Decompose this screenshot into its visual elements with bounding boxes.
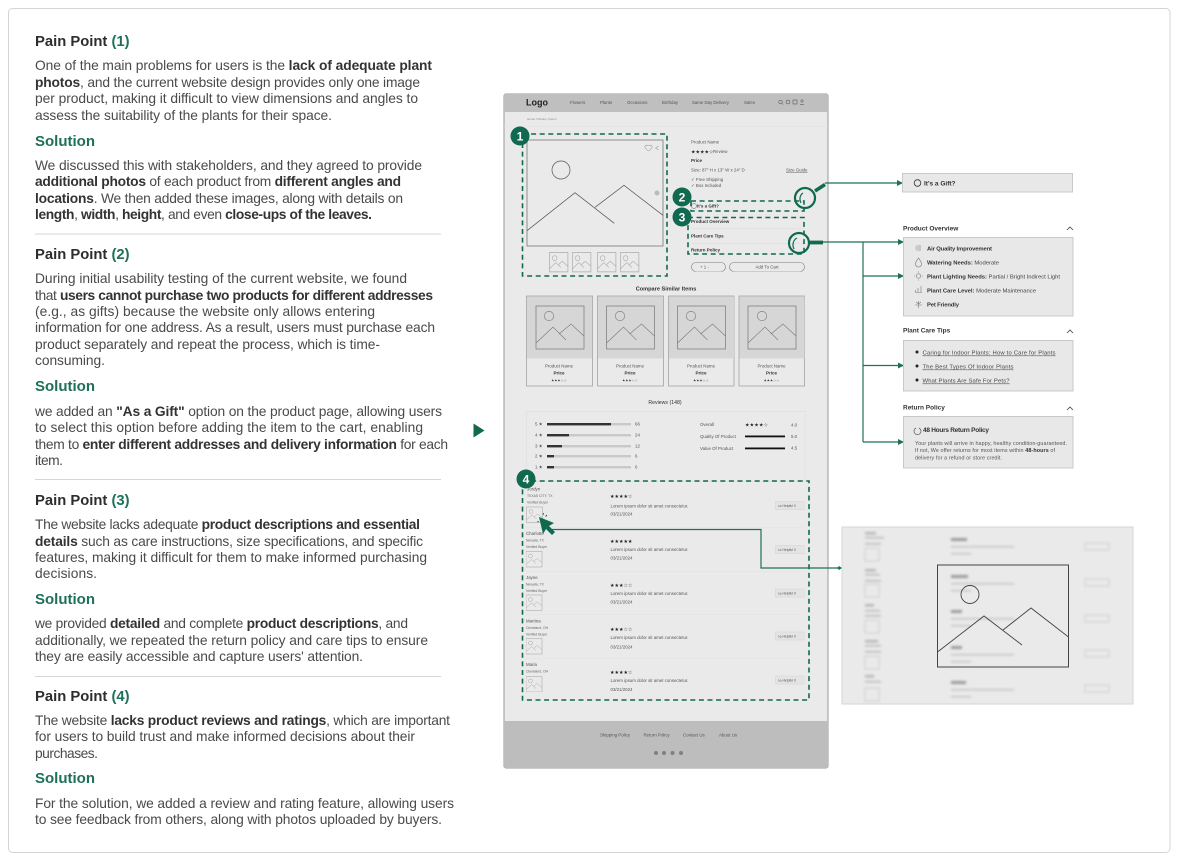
product overview panel: Plant Care Level: Moderate Maintenance (927, 288, 1037, 294)
product details: Product Name (691, 140, 720, 144)
review: Martina (526, 618, 804, 654)
review: Jayne: 👍︎ Helpful 0 (778, 592, 796, 596)
callout: return policy (903, 404, 1073, 468)
solution 1 text: length, width, height, and even close-ups of the leaves. (35, 207, 372, 222)
product details: It's a Gift? (697, 204, 719, 208)
rating distribution bars: 66 (635, 422, 640, 426)
dashed highlight: product accordions (688, 218, 804, 254)
pain point 2 text (35, 271, 435, 368)
product details: Add To Cart (755, 264, 779, 270)
product card 4: ★★★☆☆ (764, 378, 780, 382)
pain point 2 text: product separately and repeat the process, which is time- (35, 337, 380, 352)
product card 1 (526, 296, 592, 386)
badge 2 (672, 188, 692, 206)
product details: Price (691, 158, 703, 163)
review: Jayne: 03/21/2024 (610, 600, 633, 604)
wireframe footer (504, 721, 828, 768)
arrow: review photo connector (537, 513, 840, 570)
pain point 4 text: purchases. (35, 746, 98, 761)
rating distribution bars: 4 ★ (535, 432, 543, 438)
pain point 4 text: for users to build trust and make informed decisions about their (35, 729, 415, 744)
product card 2: Product Name (616, 364, 645, 368)
wireframe header (504, 94, 828, 127)
review: Jordyn: Jordyn (527, 486, 541, 492)
product card 1: Product Name (545, 364, 574, 368)
pain point 2 heading: Pain Point (2) (35, 247, 130, 263)
dashed highlight: product images (522, 134, 667, 276)
wireframe footer: Shipping Policy (600, 732, 631, 738)
overall ratings: Value Of Product (700, 446, 734, 451)
return policy heading: Return Policy (903, 404, 945, 412)
rating distribution bars: 6 (635, 464, 638, 470)
customer review list (526, 486, 804, 692)
wireframe header: Plants (600, 100, 613, 105)
product card 1: Price (553, 370, 565, 376)
pain point 2 text: (e.g., as gifts) because the website only allows entering (35, 304, 375, 319)
solution 3 heading: Solution (35, 591, 95, 608)
review: Martina: 03/21/2024 (610, 644, 633, 650)
reviews summary (526, 400, 805, 482)
wireframe header: Home / Plants / Ipsum (527, 117, 557, 121)
dashed highlight: customer reviews (522, 481, 809, 700)
rating distribution bars: 3 ★ (535, 444, 543, 448)
solution 1 text: locations. We then added these images, along with details on (35, 191, 403, 206)
return policy panel: Your plants will arrive in happy, healthy condition-guaranteed. (915, 441, 1067, 447)
review: Maria: Maria (526, 662, 538, 667)
review: Charlotte: Charlotte (526, 531, 544, 536)
product details: Product Overview (691, 219, 730, 224)
badge 1: 1 (517, 130, 524, 144)
product card 1: ★★★☆☆ (551, 378, 568, 382)
arrow: accordion connector (823, 242, 903, 442)
product details: Plant Care Tips (691, 234, 724, 238)
review: Jayne: ★★★☆☆ (610, 583, 633, 589)
review: Jayne: Jayne (526, 575, 538, 580)
wireframe footer: About Us (719, 732, 738, 738)
pain point 4 text (35, 713, 450, 761)
plant care tips panel: Caring for Indoor Plants: How to Care for Plants (922, 350, 1056, 356)
pain point 4 text: The website lacks product reviews and ratings, which are important (35, 713, 450, 728)
enlarged photo placeholder (938, 565, 1068, 667)
product details (691, 140, 808, 272)
overall ratings: 4.5 (791, 446, 798, 450)
pain point 1 text: One of the main problems for users is the lack of adequate plant (35, 58, 432, 73)
wireframe header: Logo (526, 98, 548, 108)
product overview panel: Air Quality Improvement (927, 246, 992, 252)
pain point 2 text: information for one address. As a result, users must purchase each (35, 320, 435, 335)
overall ratings: ★★★★☆ (745, 422, 769, 428)
return policy panel: 48 Hours Return Policy (923, 427, 989, 434)
review: Jordyn: TEXAS CITY, TX (527, 494, 553, 498)
overall ratings: Quality Of Product (700, 434, 737, 439)
wireframe footer: Contact Us (683, 732, 706, 738)
review: Martina: ★★★☆☆ (610, 627, 633, 633)
review: Jordyn: 03/21/2024 (610, 512, 633, 516)
solution 3 text: additionally, we repeated the return policy and care tips to ensure (35, 633, 428, 648)
solution 2 text: we added an "As a Gift" option on the product page, allowing users (34, 404, 442, 419)
callout: product overview (903, 226, 1073, 316)
review: Jayne: Lorem ipsum dolor sit amet consectetur. (610, 591, 688, 596)
rating distribution bars: 6 (635, 454, 638, 458)
product card 4: Product Name (757, 364, 786, 368)
arrow: gift option connector (825, 182, 902, 184)
pain point 1 text: assess the suitability of the plants for their space. (35, 108, 332, 123)
return policy panel (904, 416, 1073, 468)
review: Jordyn: Verified Buyer (527, 500, 549, 504)
rating distribution bars: 12 (635, 444, 640, 448)
solution 2 heading: Solution (35, 378, 95, 395)
return policy panel: delivery for a refund or store credit. (915, 456, 1002, 462)
compare similar items (526, 286, 804, 386)
product card 3: Price (695, 370, 707, 376)
review: Maria: ★★★★☆ (610, 670, 633, 676)
pain point 1 text: per product, making it difficult to view dimensions and angles to (35, 91, 418, 106)
dashed highlight: gift option (691, 201, 804, 211)
callout: gift option (902, 174, 1072, 192)
blurred review list (865, 532, 1109, 701)
wireframe header: Occasions (627, 100, 648, 105)
overall ratings: 5.0 (791, 434, 798, 439)
review: Maria: 03/21/2024 (610, 687, 633, 692)
product details: + 1 - (700, 264, 709, 270)
pain point 1 heading: Pain Point (1) (35, 34, 130, 50)
callout: gift option: It's a Gift? (924, 180, 956, 188)
product overview panel: Pet Friendly (927, 302, 960, 308)
review: Martina: 👍︎ Helpful 0 (778, 634, 796, 638)
main product image (527, 140, 663, 272)
solution 1 text: We discussed this with stakeholders, and they agreed to provide (35, 158, 422, 173)
wireframe header: Sales (744, 100, 756, 105)
panel: page wireframe (504, 94, 828, 768)
solution 4 text: For the solution, we added a review and rating feature, allowing users (35, 796, 454, 811)
badge 3 (672, 208, 692, 226)
pain point 3 text: features, making it difficult for them to make informed purchasing (35, 550, 427, 565)
solution 3 text: they are easily accessible and capture users' attention. (35, 649, 363, 664)
arrow: text to wireframe (474, 424, 484, 438)
product card 4 (739, 296, 804, 386)
product card 3 (668, 296, 734, 386)
icon: cursor (537, 513, 555, 535)
plant care tips panel: The Best Types Of Indoor Plants (922, 364, 1014, 370)
pain point 2 text: consuming. (35, 353, 105, 368)
product details: Size Guide (786, 168, 808, 172)
badge 4 (516, 470, 536, 488)
product overview panel: Watering Needs: Moderate (927, 260, 1000, 266)
review: Maria: 👍︎ Helpful 0 (778, 678, 796, 682)
review: Jordyn: Lorem ipsum dolor sit amet consectetur. (610, 504, 688, 508)
icon: magnifier on accordions (789, 233, 823, 253)
review: Martina: Lorem ipsum dolor sit amet consectetur. (610, 635, 688, 640)
product details: Return Policy (691, 248, 721, 252)
product details: ✓ Free Shipping (691, 177, 724, 182)
review: Charlotte: ★★★★★ (610, 539, 633, 545)
review: Charlotte: Lorem ipsum dolor sit amet consectetur. (610, 547, 688, 552)
review: Charlotte: Nevada, TX (526, 538, 545, 542)
badge 3: 3 (679, 210, 686, 224)
overall ratings: Overall (700, 422, 714, 427)
product card 3: Product Name (687, 364, 716, 368)
pain point 1 text (35, 58, 432, 123)
pain point 4 heading: Pain Point (4) (35, 689, 130, 705)
review: Charlotte: Verified Buyer (526, 545, 548, 549)
solution 2 text (34, 404, 448, 468)
product card 2 (598, 296, 664, 386)
pain point 3 text (35, 517, 427, 581)
solution 1 text: additional photos of each product from different angles and (35, 174, 401, 189)
product card 4: Price (766, 370, 777, 376)
review: Jordyn: 👍︎ Helpful 0 (778, 504, 796, 508)
product card 2: Price (624, 370, 636, 376)
plant care tips heading: Plant Care Tips (903, 328, 951, 334)
product overview heading: Product Overview (903, 226, 959, 232)
rating distribution bars (535, 422, 640, 470)
product overview panel: Plant Lighting Needs: Partial / Bright Indirect Light (927, 274, 1060, 280)
panel: pain points text column (34, 34, 454, 827)
review: Martina: Cleveland, OH (526, 626, 549, 630)
pain point 3 heading: Pain Point (3) (35, 493, 130, 509)
review: Martina: Martina (526, 618, 541, 624)
solution 1 heading: Solution (35, 133, 95, 150)
return policy panel: If not, We offer returns for most items within 48-hours of (915, 448, 1056, 454)
review: Jordyn: ★★★★☆ (610, 494, 633, 500)
solution 3 text (34, 616, 428, 664)
review: Charlotte: 👍︎ Helpful 0 (778, 548, 796, 552)
review: Maria (526, 662, 804, 692)
wireframe footer: Return Policy (644, 732, 670, 738)
wireframe header: Flowers (570, 100, 586, 105)
review: Maria: Cleveland, OH (526, 670, 549, 674)
overall ratings (700, 422, 798, 451)
reviews heading: Reviews (148) (648, 400, 682, 406)
review: Jayne: Verified Buyer (526, 589, 548, 593)
product details: Review (713, 149, 728, 154)
rating distribution bars: 5 ★ (535, 422, 543, 426)
review: Jayne: Nevada, TX (526, 582, 545, 586)
product overview panel (904, 238, 1073, 316)
solution 4 text: to see feedback from others, along with photos uploaded by buyers. (35, 812, 442, 827)
solution 2 text: them to enter different addresses and delivery information for each (35, 437, 448, 452)
product details: ★★★★☆ (691, 150, 714, 156)
pain point 3 text: details such as care instructions, size specifications, and specific (35, 534, 423, 549)
solution 4 heading: Solution (35, 770, 95, 787)
badge 2: 2 (679, 190, 686, 204)
arrowhead: enlarged photo connector (839, 566, 842, 570)
wireframe header: Birthday (662, 100, 679, 105)
product card 2: ★★★☆☆ (622, 378, 639, 382)
product card 3: ★★★☆☆ (693, 378, 710, 382)
solution 2 text: item. (35, 453, 63, 468)
solution 1 text (35, 158, 422, 222)
pain point 2 text: that users cannot purchase two products for different addresses (35, 288, 433, 303)
product details: ✓ Box Included (691, 183, 722, 188)
review: Charlotte (526, 531, 804, 567)
pain point 1 text: photos, and the current website design provides only one image (35, 75, 420, 90)
pain point 2 text: During initial usability testing of the current website, we found (35, 271, 407, 286)
pain point 3 text: The website lacks adequate product descriptions and essential (35, 517, 420, 532)
review: Jayne (526, 575, 804, 610)
callout: plant care tips (903, 328, 1073, 391)
solution 2 text: to select this option before adding the item to the cart, enabling (35, 420, 423, 435)
wireframe header: Same Day Delivery (692, 100, 730, 105)
review: Maria: Lorem ipsum dolor sit amet consectetur. (610, 678, 688, 683)
rating distribution bars: 1 ★ (535, 464, 543, 470)
solution 4 text (35, 796, 454, 827)
pain point 3 text: decisions. (35, 566, 97, 581)
solution 3 text: we provided detailed and complete product descriptions, and (34, 616, 408, 631)
review: Jordyn (526, 486, 804, 522)
review: Charlotte: 03/21/2024 (610, 556, 633, 560)
compare heading: Compare Similar Items (636, 286, 696, 292)
plant care tips panel (904, 340, 1073, 391)
rating distribution bars: 2 ★ (535, 454, 543, 458)
badge 1 (510, 126, 530, 146)
overall ratings: 4.0 (791, 422, 798, 428)
panel: enlarged review photo (842, 527, 1133, 704)
plant care tips panel: What Plants Are Safe For Pets? (922, 378, 1010, 384)
rating distribution bars: 24 (635, 432, 640, 438)
icon: magnifier on gift option (795, 184, 825, 208)
badge 4: 4 (523, 472, 530, 486)
review: Martina: Verified Buyer (526, 632, 548, 636)
product details: Size: 87" H x 13" W x 24" D (691, 168, 745, 172)
